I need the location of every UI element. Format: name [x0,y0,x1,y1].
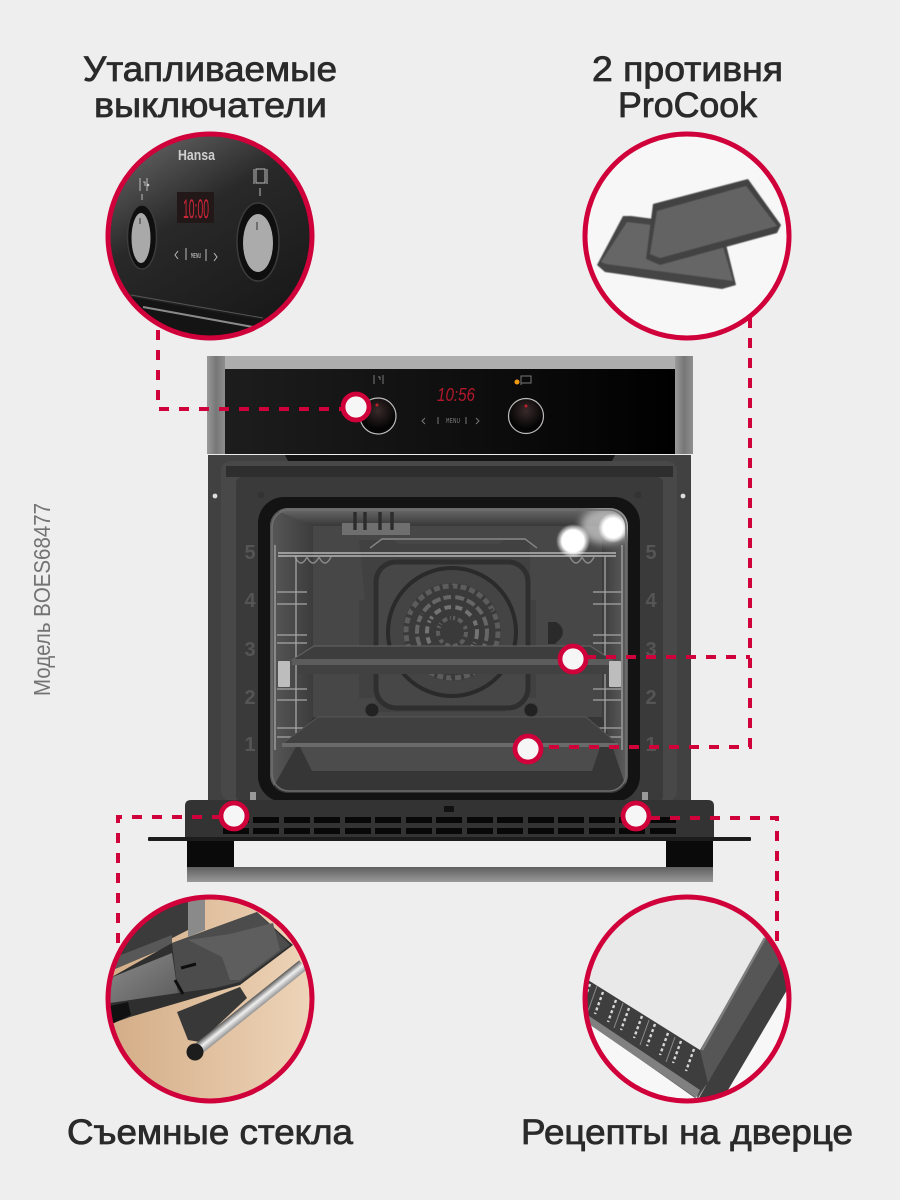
heater tubes [342,512,410,535]
shelf numbers: 3 [645,639,657,661]
shelf numbers: 4 [244,590,256,612]
bottom trim [131,295,263,318]
display [177,192,214,224]
door steel strip [187,867,713,882]
oven control panel [207,356,693,454]
oven behind [120,902,188,956]
handle bracket [177,987,247,1042]
lamp [556,508,632,558]
marker: knob [343,394,369,420]
brand logo: Hansa [178,147,216,164]
marker: lower tray [515,736,541,762]
shelf numbers: 2 [244,687,256,709]
side rails [275,545,622,750]
fan plate [366,560,563,716]
front tray [646,179,781,265]
shelf numbers: 5 [645,542,657,564]
title: two baking trays: ProCook [618,86,758,125]
title: two baking trays [592,50,783,125]
door base [234,841,666,867]
menu touch buttons: MENU [191,253,201,261]
marker: right door [623,803,649,829]
title: two baking trays: 2 противня [592,50,783,89]
top wire rack [278,539,616,563]
floor [276,717,625,784]
detail circle: control panel [100,130,320,345]
panel display: 10:56 [437,385,476,405]
lower baking tray [282,717,618,771]
shelf numbers: 2 [645,687,657,709]
title: retractable knobs: выключатели [94,86,327,125]
oven cavity [270,508,632,793]
detail circle: trays [585,134,789,338]
panel indicator [514,380,520,384]
shelf numbers: 4 [645,590,657,612]
detail circle: control panel: 10:00 [183,194,209,224]
oven body [208,455,691,802]
shelf numbers: 5 [244,542,256,564]
upper baking tray [278,646,621,687]
ceiling [278,508,622,522]
title: retractable knobs: Утапливаемые [83,50,337,89]
door glass [148,837,751,841]
title: removable glass: Съемные стекла [67,1113,354,1152]
oven illustration [148,356,751,882]
menu touch buttons [175,248,217,261]
right knob [237,203,279,281]
connector lines [118,318,777,950]
back wall [313,526,602,718]
shelf numbers: 3 [244,639,256,661]
light frame [697,938,780,1098]
door vents [223,820,676,831]
panel left knob [360,398,396,434]
recipe marks [582,984,694,1071]
panel right knob [508,398,544,434]
title: recipes on the door: Рецепты на дверце [521,1113,853,1152]
shelf numbers [244,542,657,756]
title: retractable knobs [83,50,337,125]
door corner [110,912,293,1023]
model label: Модель BOES68477 [29,503,55,696]
glass surface [590,900,765,1050]
handle bar [197,965,303,1050]
oven door [148,800,751,882]
marker: upper tray [560,646,586,672]
back tray [597,216,736,289]
detail circle: removable glass [100,890,320,1110]
left knob [128,205,156,269]
dark frame [699,963,786,1098]
detail circle: recipes on door [580,890,800,1110]
shelf numbers: 1 [645,734,657,756]
window rim [272,510,626,791]
shelf numbers: 1 [244,734,256,756]
function icons [140,169,267,200]
recipe strip [588,980,708,1098]
marker: left door [221,803,247,829]
panel touch menu: MENU [446,418,460,426]
side walls [270,512,304,786]
